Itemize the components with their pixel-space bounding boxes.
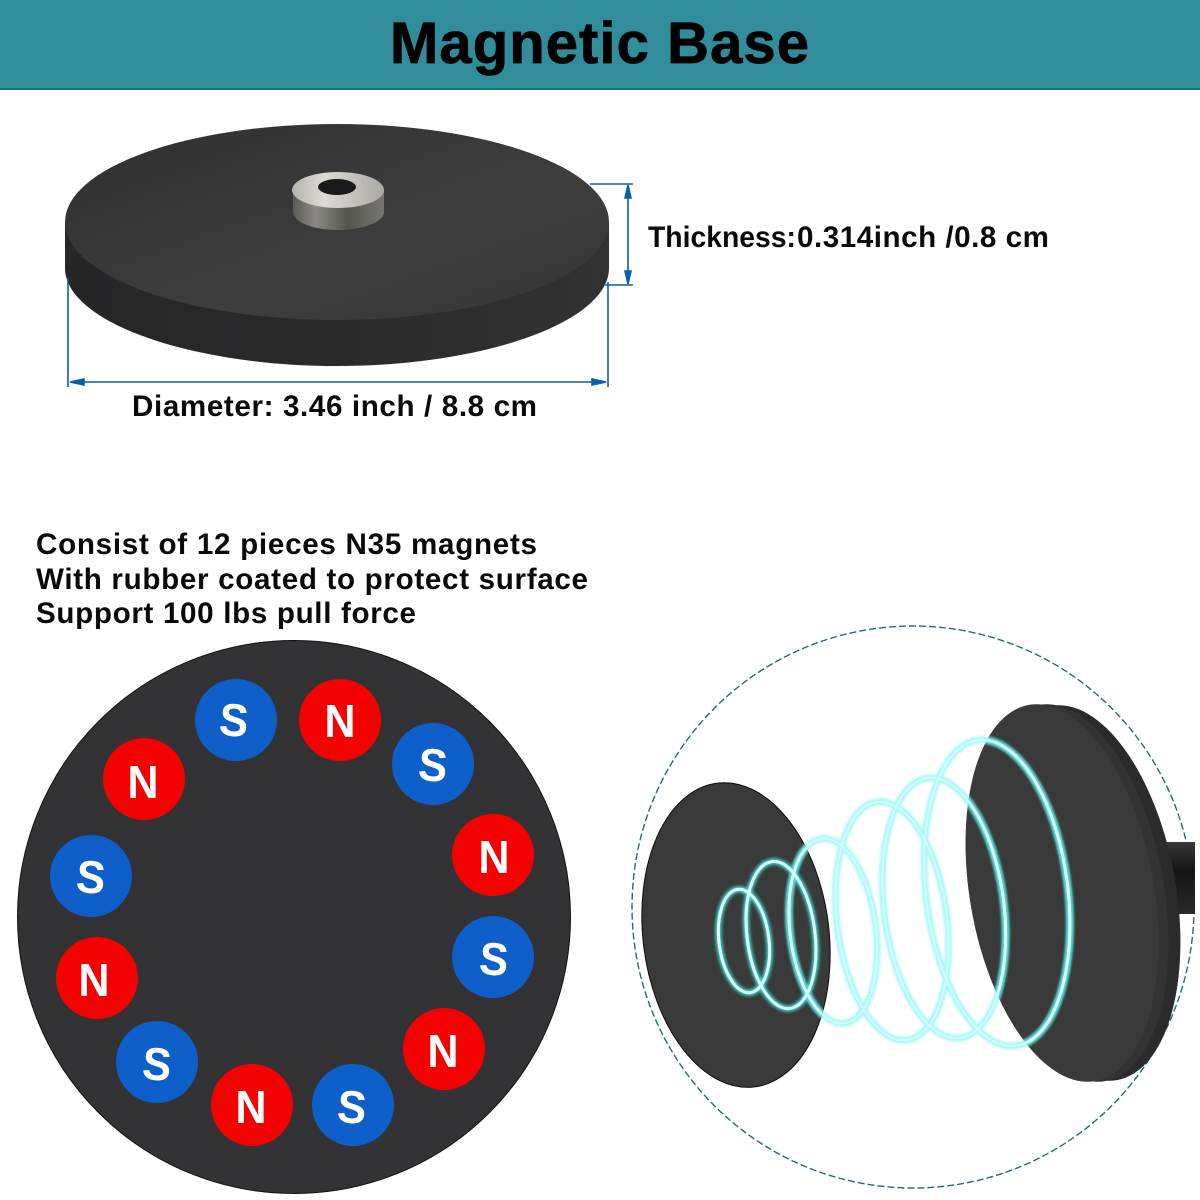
magnet N: N xyxy=(428,1025,458,1077)
label: diameter: Diameter: 3.46 inch / 8.8 cm xyxy=(132,390,537,423)
magnet N xyxy=(403,1008,485,1090)
header banner xyxy=(0,0,1200,90)
magnet S: S xyxy=(477,932,511,986)
text block: magnet features xyxy=(36,528,588,630)
magnet N xyxy=(299,679,381,761)
product photo: magnetic base disc with threaded stud xyxy=(65,124,609,366)
dimension: thickness arrows xyxy=(590,184,633,285)
magnet S: S xyxy=(335,1080,369,1134)
magnet N xyxy=(211,1064,293,1146)
dimension: diameter arrows xyxy=(68,278,608,387)
magnet S xyxy=(452,916,534,998)
magnet N: N xyxy=(324,695,356,747)
label: thickness: 0.314inch /0.8 cm xyxy=(797,221,1049,254)
text block: magnet features: Support 100 lbs pull force xyxy=(36,597,416,630)
magnet N: N xyxy=(128,756,158,808)
label: thickness xyxy=(648,221,1049,254)
magnet N xyxy=(452,814,534,896)
label: thickness: Thickness: xyxy=(648,221,796,254)
magnet S: S xyxy=(74,850,108,904)
magnet N: N xyxy=(478,831,510,883)
magnet S: S xyxy=(140,1037,174,1091)
magnet S: S xyxy=(416,738,450,792)
magnet S: S xyxy=(217,693,251,747)
magnet S xyxy=(392,723,474,805)
magnetic field rings xyxy=(713,731,1086,1055)
stud on large disc xyxy=(1165,842,1195,914)
magnet N xyxy=(103,738,185,820)
icon: threaded steel stud xyxy=(292,172,384,230)
small magnet disc xyxy=(625,772,847,1098)
large magnet disc xyxy=(938,689,1200,1097)
magnet S xyxy=(195,679,277,761)
panel: magnet layout disc xyxy=(18,640,570,1194)
panel: magnetic field illustration xyxy=(625,626,1200,1188)
dashed circle outline xyxy=(632,626,1194,1188)
magnet S xyxy=(116,1021,198,1103)
magnet N: N xyxy=(78,954,110,1006)
magnet S xyxy=(312,1064,394,1146)
magnet N: N xyxy=(236,1081,266,1133)
title: Magnetic Base xyxy=(390,11,809,76)
text block: magnet features: With rubber coated to protect surface xyxy=(36,563,588,596)
text block: magnet features: Consist of 12 pieces N35 magnets xyxy=(36,528,537,561)
magnet S xyxy=(50,835,132,917)
magnet N xyxy=(56,937,138,1019)
